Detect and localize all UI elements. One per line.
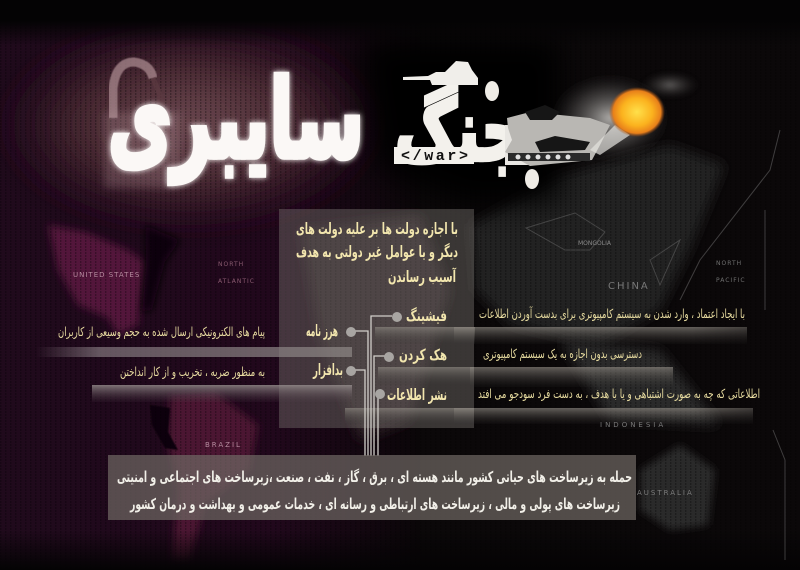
text: definition: با اجازه دولت ها بر علیه دولت های: [296, 220, 458, 238]
labels: attack types: فیشینگ: [406, 307, 447, 325]
icon: title dots: [485, 81, 539, 189]
background: dark world map: ATLANTIC: [218, 278, 255, 285]
text: definition: [296, 220, 458, 286]
icon: tank silhouette above title: [403, 61, 478, 85]
map: dark atlantic coast: [142, 225, 180, 312]
text: left descriptions: به منظور ضربه ، تخریب و از کار انداختن: [120, 364, 265, 380]
labels: attack types: نشر اطلاعات: [387, 386, 447, 404]
icon: padlock: [104, 62, 180, 188]
text: right descriptions: دسترسی بدون اجازه به یک سیستم کامپیوتری: [483, 346, 642, 362]
tag: war code label: </war>: [401, 148, 468, 165]
map: asia: [470, 145, 725, 345]
background: dark world map: MONGOLIA: [578, 240, 612, 247]
background: dark world map: CHINA: [608, 281, 650, 292]
map: australia: [640, 445, 715, 530]
icon: exploding tank and fireball: [505, 71, 700, 166]
labels: attack types: بدافزار: [312, 361, 343, 379]
background: dark world map: INDONESIA: [600, 421, 666, 429]
panel: critical infrastructure: [108, 455, 636, 520]
map: top dark: [360, 40, 560, 205]
decorative bands: [454, 327, 753, 424]
text: left descriptions: پیام های الکترونیکی ارسال شده به حجم وسیعی از کاربران: [58, 324, 265, 340]
labels: attack types: هک کردن: [399, 346, 447, 364]
map: southeast asia: [560, 340, 720, 425]
background: dark world map: NORTH: [218, 261, 244, 268]
title: war word: جنگ: [395, 82, 525, 181]
labels: attack types: هرز نامه: [306, 322, 338, 340]
background: dark world map: AUSTRALIA: [637, 489, 694, 497]
map: dark peru region: [150, 405, 178, 450]
title: war word: [394, 82, 525, 181]
text: definition: آسیب رساندن: [388, 267, 456, 286]
map: africa under panel: [300, 215, 450, 440]
map: south america: [168, 392, 258, 560]
panel: definition panel: [279, 209, 474, 428]
connector lines: [352, 316, 392, 456]
background: dark world map: BRAZIL: [205, 441, 242, 449]
text: infrastructure description: [117, 468, 632, 514]
icon: node dots: [346, 312, 402, 399]
text: definition: دیگر و یا عوامل غیر دولتی به هدف: [296, 242, 458, 261]
text: right descriptions: [478, 306, 760, 402]
background: dark world map: PACIFIC: [716, 277, 746, 284]
background: dark world map: NORTH: [716, 260, 742, 267]
map: north america: [48, 225, 145, 335]
title: cyber war: سایبری: [108, 56, 364, 184]
background: dark world map: UNITED STATES: [73, 271, 140, 279]
labels: attack types: [306, 307, 447, 404]
text: left descriptions: [58, 324, 265, 380]
